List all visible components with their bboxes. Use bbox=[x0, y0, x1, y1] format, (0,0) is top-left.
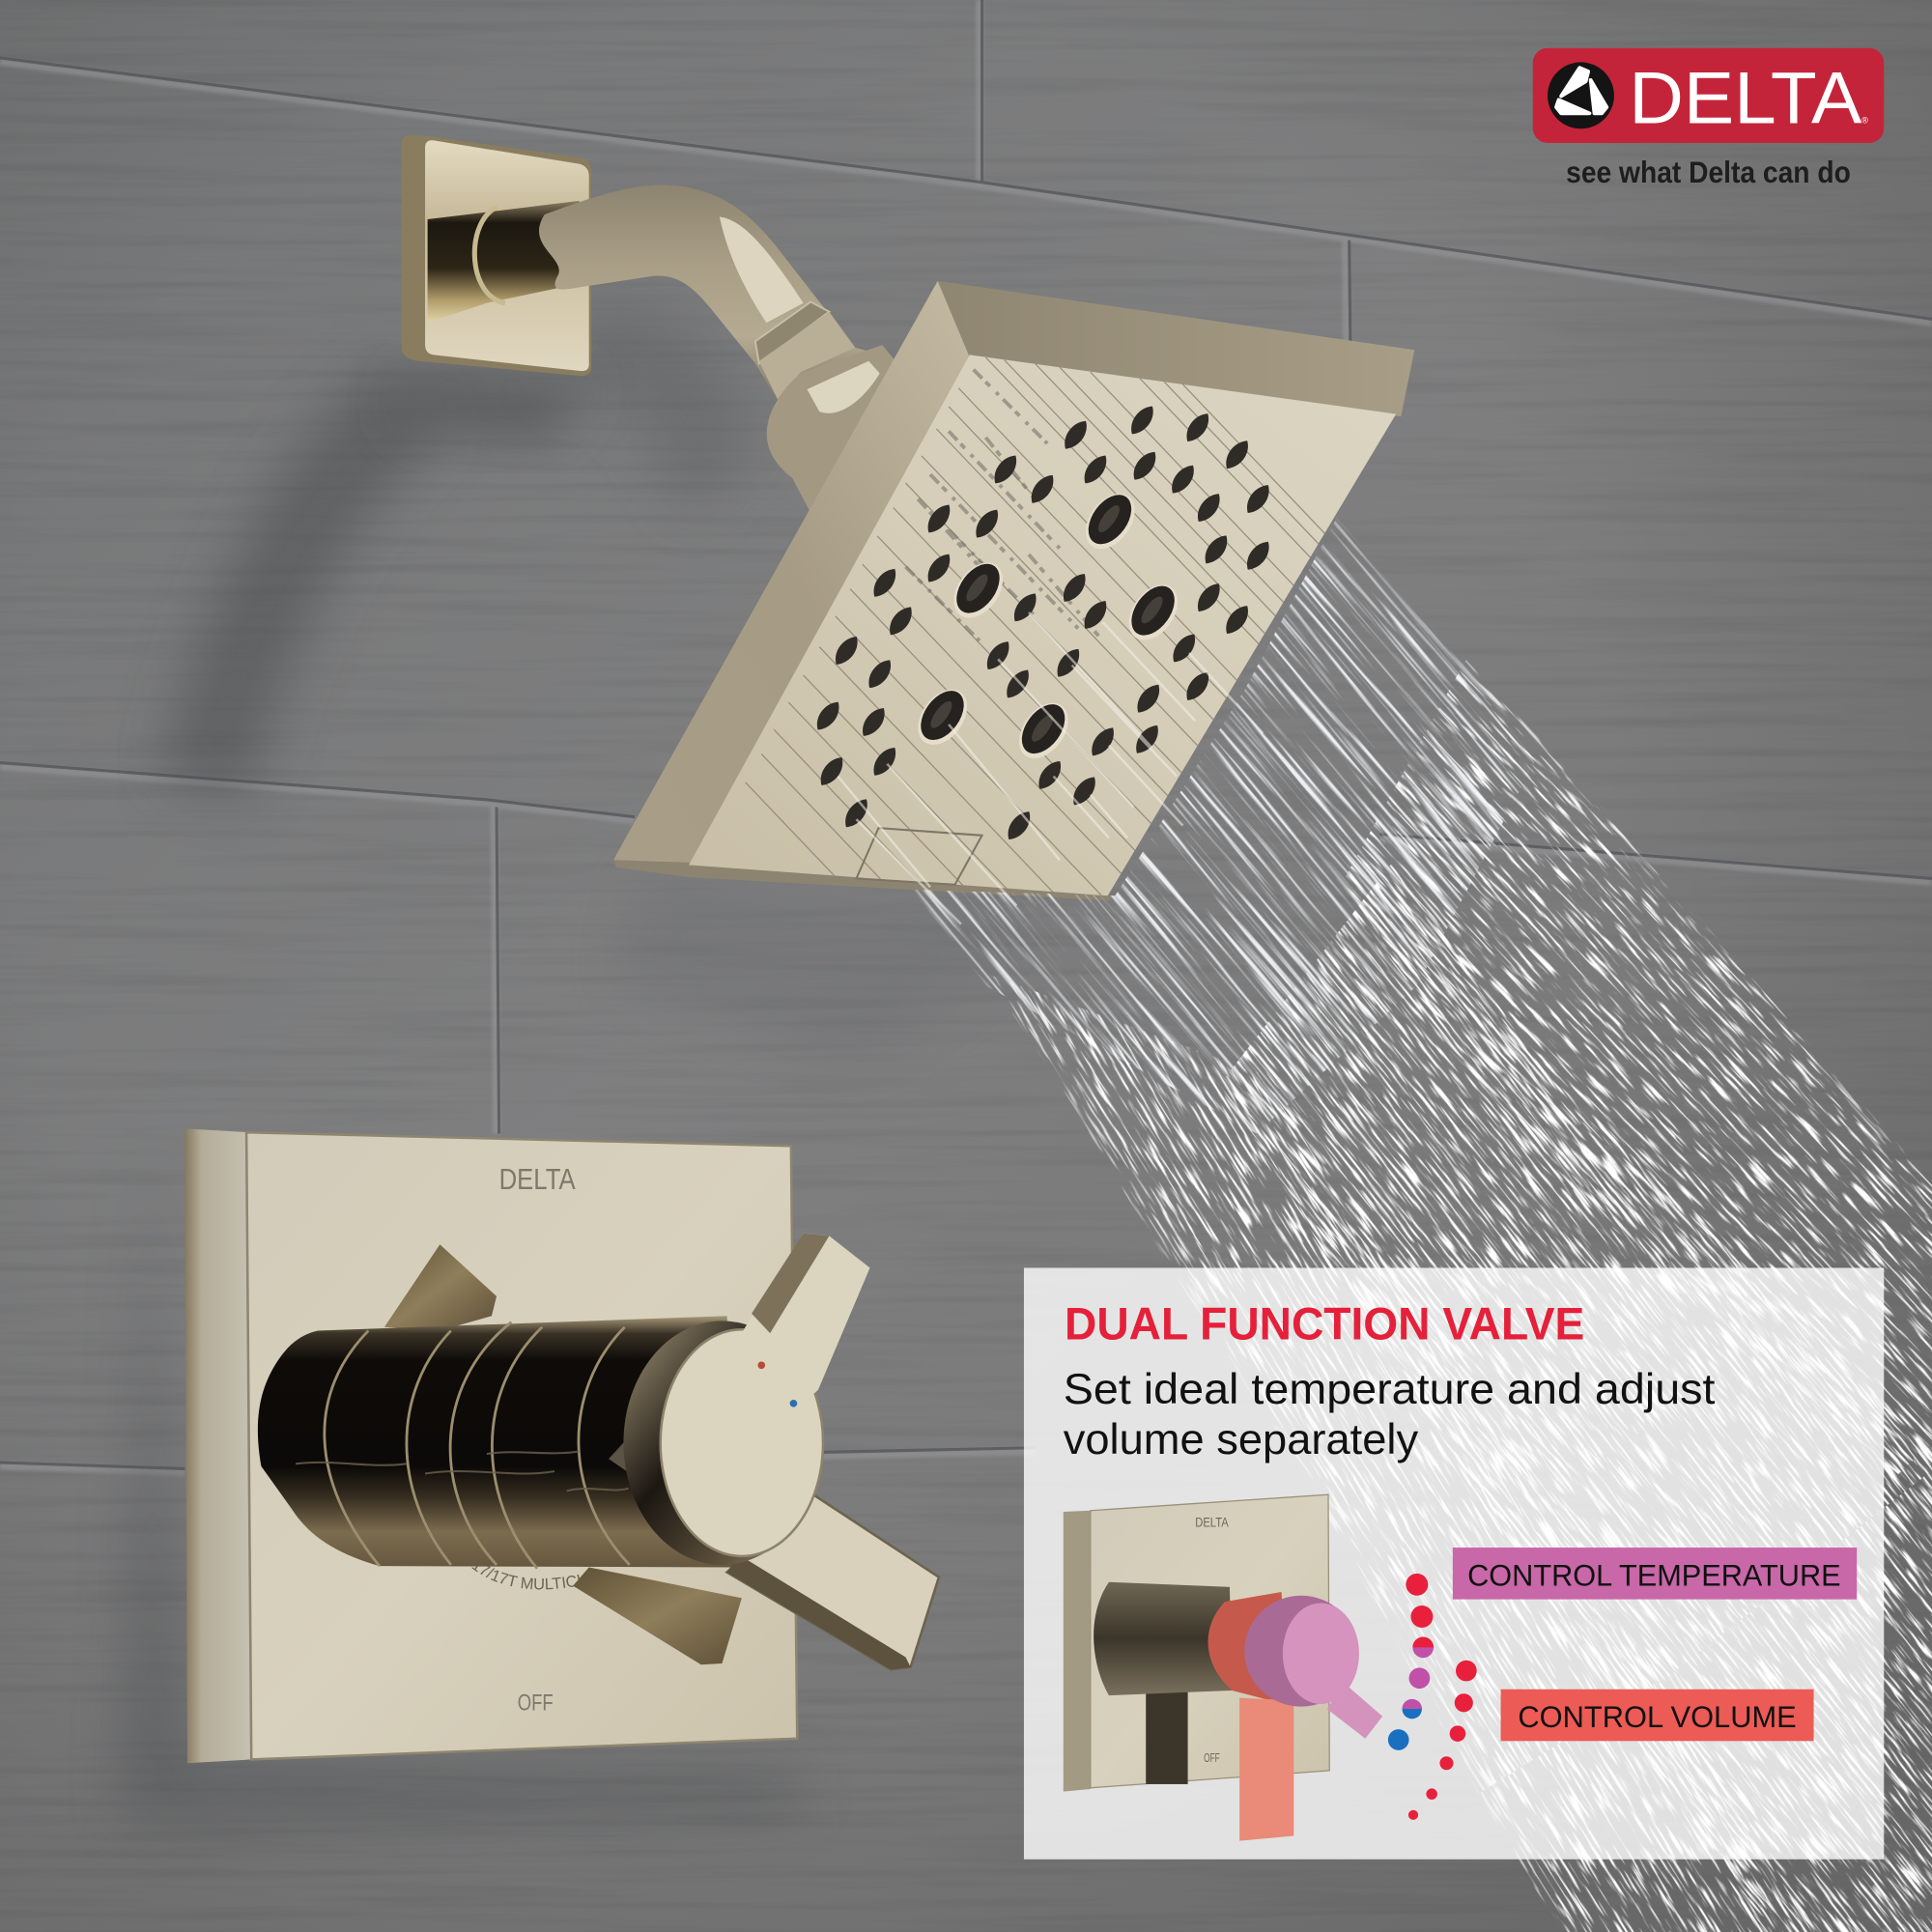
logo badge bbox=[1533, 48, 1884, 143]
upper handle shaded edge bbox=[752, 1234, 829, 1333]
valve diagram bbox=[1064, 1494, 1382, 1841]
registered mark: ® bbox=[1861, 116, 1868, 126]
knob face bbox=[661, 1329, 823, 1556]
cylinder highlight bbox=[609, 1417, 656, 1479]
knob cold mark bbox=[790, 1400, 797, 1407]
upper handle bbox=[739, 1234, 870, 1417]
valve plate side strip bbox=[185, 1128, 251, 1763]
arm lower sleeve bbox=[759, 312, 855, 399]
temperature label: CONTROL TEMPERATURE bbox=[1467, 1558, 1841, 1593]
panel description: volume separately bbox=[1064, 1416, 1419, 1463]
rear upper lever bbox=[384, 1244, 497, 1331]
valve cylinder body bbox=[258, 1316, 739, 1567]
rear lower lever bbox=[573, 1567, 742, 1664]
panel description bbox=[1064, 1366, 1716, 1463]
volume label bbox=[1501, 1690, 1814, 1741]
spray field left bbox=[985, 974, 1817, 1932]
flange front face bbox=[425, 140, 589, 371]
shower arm and flange bbox=[402, 135, 906, 518]
panel description: Set ideal temperature and adjust bbox=[1064, 1366, 1716, 1413]
spray grooves bbox=[745, 357, 1325, 895]
valve plate bbox=[246, 1132, 797, 1759]
spray field middle bbox=[1220, 863, 1932, 1932]
water marbling on face bbox=[906, 370, 1103, 640]
front lever bbox=[727, 1494, 939, 1669]
shower head bbox=[613, 281, 1414, 925]
ball joint bbox=[767, 345, 906, 518]
temperature handle highlight bbox=[1244, 1596, 1382, 1739]
panel background bbox=[1024, 1267, 1884, 1860]
wall shadows bbox=[124, 296, 1084, 1824]
plate model text: 17/17T MULTICHOICE bbox=[471, 1567, 580, 1590]
volume dots bbox=[1408, 1661, 1477, 1820]
head bottom edge bbox=[613, 860, 1115, 900]
cylinder reflections bbox=[296, 1452, 629, 1491]
lever lower edge bbox=[727, 1555, 911, 1669]
volume handle highlight bbox=[1208, 1592, 1293, 1841]
knob hot mark bbox=[757, 1361, 765, 1369]
knob ring bbox=[623, 1321, 820, 1565]
arm stem reflection bbox=[428, 201, 591, 323]
delta logo bbox=[1533, 48, 1884, 189]
threaded collar bbox=[755, 301, 829, 363]
plate off text: OFF bbox=[518, 1690, 554, 1716]
water spray bbox=[912, 518, 1932, 1932]
long streams near head bbox=[912, 518, 1540, 1133]
plate brand text: DELTA bbox=[499, 1163, 576, 1196]
thermostatic valve trim bbox=[185, 1128, 941, 1764]
logo emblem bbox=[1548, 62, 1614, 128]
cylinder grooves bbox=[325, 1322, 630, 1569]
panel title: DUAL FUNCTION VALVE bbox=[1065, 1298, 1584, 1350]
curved arm bbox=[539, 185, 890, 402]
ball joint highlight bbox=[807, 361, 880, 413]
arm collar bbox=[474, 207, 505, 303]
tagline: see what Delta can do bbox=[1566, 155, 1851, 189]
water running over face bbox=[838, 612, 1263, 924]
spray field right bbox=[1343, 659, 1932, 1503]
feature callout panel bbox=[1024, 1267, 1884, 1860]
face latch outline bbox=[856, 828, 982, 885]
head left rim bbox=[613, 281, 970, 865]
head face bbox=[689, 355, 1396, 895]
head top rim bbox=[938, 281, 1414, 416]
nozzles bbox=[811, 402, 1274, 844]
flange bbox=[402, 135, 591, 376]
valve diagram: OFF bbox=[1204, 1750, 1220, 1765]
valve diagram: DELTA bbox=[1195, 1514, 1229, 1529]
arm highlight bbox=[720, 216, 804, 323]
logo wordmark: DELTA bbox=[1629, 58, 1861, 140]
volume label: CONTROL VOLUME bbox=[1518, 1699, 1797, 1734]
temperature dots bbox=[1388, 1574, 1434, 1750]
temperature label bbox=[1453, 1548, 1857, 1600]
